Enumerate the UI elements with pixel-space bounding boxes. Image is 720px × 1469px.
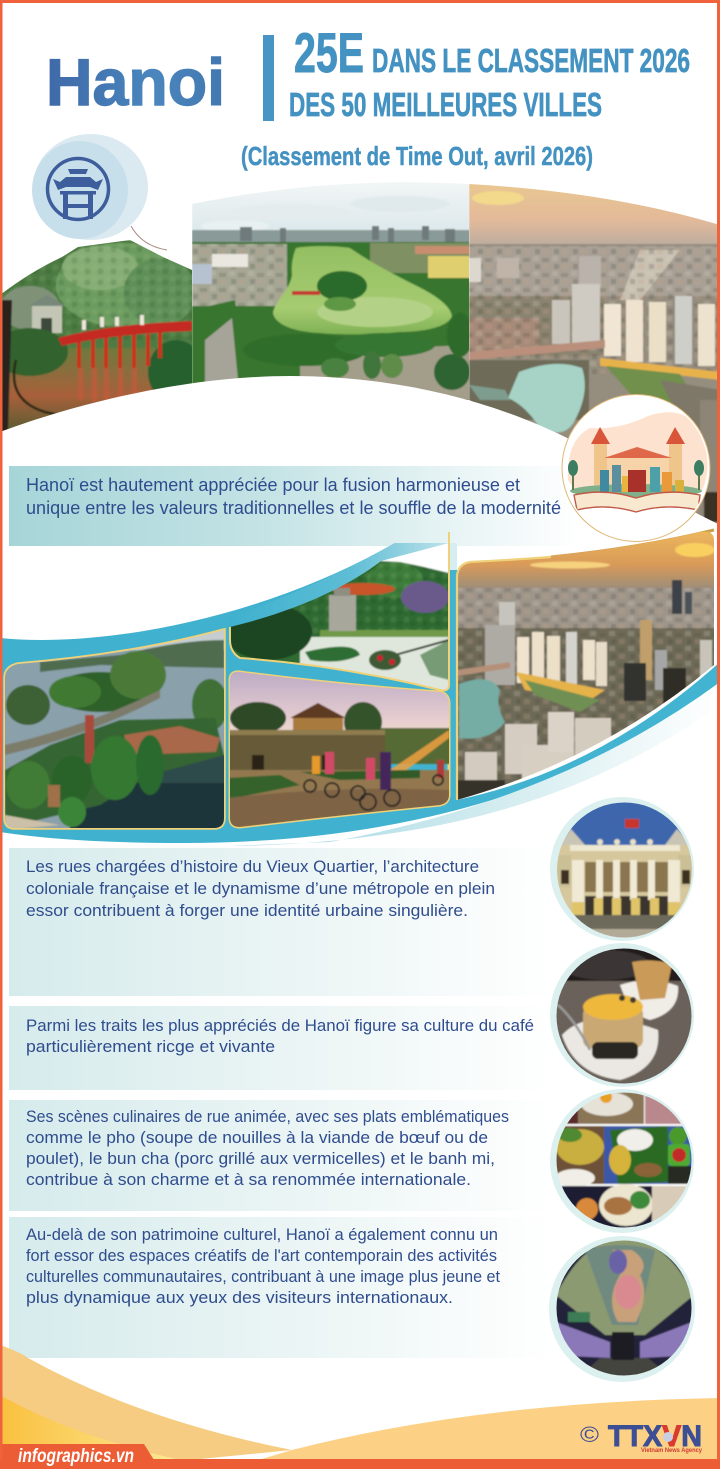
text block: intro: unique entre les valeurs traditionnelles et le souffle de la modernité (26, 497, 561, 518)
footer left wave (0, 1345, 292, 1461)
panel: text block cuisine: contribue à son charme et à sa renommée internationale. (26, 1171, 471, 1189)
subtitle: source: (Classement de Time Out, avril 2026) (241, 141, 593, 171)
photo: Hanoi skyline at sunset (469, 180, 720, 534)
photo: Thang Long citadel with cyclists (228, 668, 452, 830)
logo: TTXVN: Vietnam News Agency (641, 1447, 702, 1454)
logo: TTXVN: © (580, 1422, 599, 1447)
photo: Hanoi modern skyline (455, 528, 717, 803)
photo circle: Vietnamese street food (550, 1089, 695, 1233)
panel: text block café (9, 1006, 554, 1090)
text block: intro: Hanoï est hautement appréciée pour la fusion harmonieuse et (26, 474, 520, 495)
source tag: infographics.vn: infographics.vn (18, 1446, 134, 1467)
white dome below top photos (0, 376, 575, 480)
panel: text block Vieux Quartier: Les rues chargées d’histoire du Vieux Quartier, l’architecture (26, 858, 479, 876)
panel: text block art contemporain: fort essor des espaces créatifs de l'art contemporain des activités (26, 1247, 497, 1265)
icon: book with city illustration (562, 394, 710, 542)
panel: text block art contemporain: Au-delà de son patrimoine culturel, Hanoï a également connu un (26, 1226, 498, 1244)
photo: Tran Quoc pagoda, West Lake (0, 625, 230, 831)
panel: text block cuisine: poulet), le bun cha (porc grillé aux vermicelles) et le banh mi, (26, 1150, 495, 1168)
text block: intro (9, 466, 579, 546)
photo: Turtle Tower (224, 530, 453, 700)
panel: text block Vieux Quartier: essor contribuent à forger une identité urbaine singulière. (26, 902, 468, 920)
photo: Huc bridge, Hoan Kiem (2, 240, 192, 431)
photo circle: egg coffee (550, 943, 695, 1087)
panel: text block cuisine: comme le pho (soupe de nouilles à la viande de bœuf ou de (26, 1129, 488, 1147)
icon: Hanoi emblem (32, 134, 148, 240)
panel: text block art contemporain (9, 1217, 554, 1358)
title: ranking heading (289, 21, 690, 124)
photo: aerial view of Hoan Kiem lake (192, 180, 473, 402)
photo circle: Opera House (550, 797, 695, 941)
title: Hanoi: Hanoi (46, 45, 225, 119)
footer right wave (255, 1398, 720, 1461)
logo: TTXVN: TTXVN (608, 1420, 702, 1453)
dotted divider (50, 444, 562, 446)
footer bar (0, 1459, 720, 1469)
panel: text block Vieux Quartier: coloniale française et le dynamisme d’une métropole en plein (26, 880, 495, 898)
panel: text block cuisine: Ses scènes culinaires de rue animée, avec ses plats emblématiques (26, 1108, 509, 1126)
panel: text block art contemporain: plus dynamique aux yeux des visiteurs internationaux. (26, 1289, 453, 1307)
panel: text block Vieux Quartier (9, 848, 554, 996)
panel: text block café: Parmi les traits les plus appréciés de Hanoï figure sa culture du café (26, 1017, 534, 1035)
title separator bar (263, 35, 274, 121)
panel: text block café: particulièrement ricge et vivante (26, 1038, 275, 1056)
panel: text block art contemporain: culturelles communautaires, contribuant à une image plus jeune et (26, 1268, 500, 1286)
blue wave band behind gallery (0, 543, 720, 846)
panel: text block cuisine (9, 1100, 554, 1211)
photo circle: contemporary art tunnel (549, 1236, 695, 1382)
branch near emblem (131, 226, 167, 250)
title: ranking heading: 25E (294, 21, 364, 84)
